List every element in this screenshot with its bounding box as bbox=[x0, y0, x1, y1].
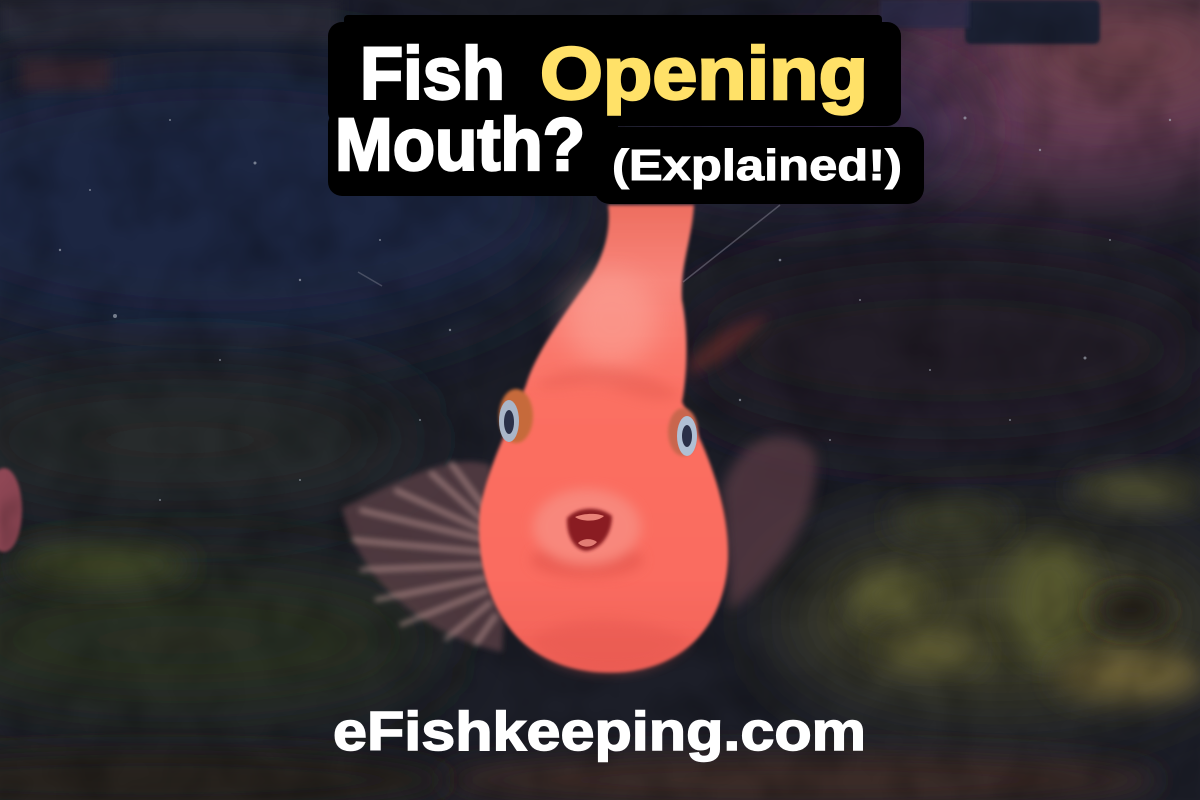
eye: left bbox=[499, 389, 533, 443]
title: line two: Mouth? bbox=[335, 103, 585, 186]
subtitle: (Explained!) bbox=[612, 141, 902, 190]
eye: right bbox=[668, 408, 698, 456]
footer: website: eFishkeeping.com bbox=[333, 700, 866, 762]
title block bbox=[328, 15, 924, 204]
shading: chin bbox=[530, 619, 690, 672]
title: line one: Fish bbox=[360, 32, 505, 115]
fin: left pectoral bbox=[342, 462, 505, 652]
fin: right pectoral bbox=[722, 436, 816, 610]
specks: floating debris bbox=[59, 116, 1171, 501]
title background bbox=[328, 15, 924, 204]
fish: red parrot cichlid bbox=[342, 205, 816, 673]
mouth: open lips bbox=[531, 489, 643, 578]
title: highlighted word: Opening bbox=[540, 32, 868, 115]
highlight: back bbox=[566, 272, 658, 368]
fish: body outline bbox=[479, 205, 728, 673]
fin: dorsal wisp bbox=[690, 315, 770, 375]
shading: forehead bbox=[535, 367, 680, 400]
